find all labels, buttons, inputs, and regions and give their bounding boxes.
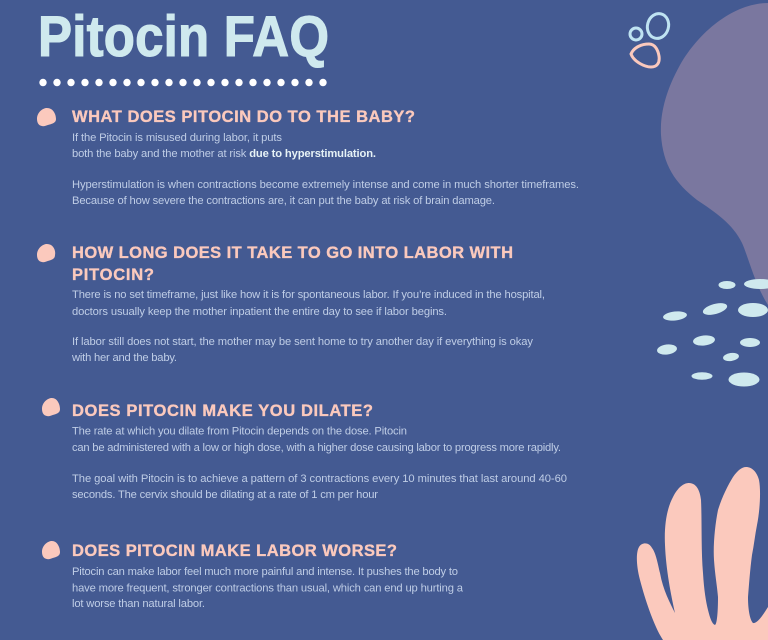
body text 2: with her and the baby. (71, 352, 177, 364)
panel: what does Pitocin do to the baby (37, 108, 579, 207)
heading 4: DOES PITOCIN MAKE LABOR WORSE? (72, 542, 397, 560)
body text 2: doctors usually keep the mother inpatient the entire day to see if labor begins. (72, 306, 447, 318)
heading 3: DOES PITOCIN MAKE YOU DILATE? (72, 402, 373, 420)
body text 4: lot worse than natural labor. (72, 598, 205, 610)
panel: does Pitocin make labor worse (42, 541, 464, 610)
title: Pitocin FAQ (38, 5, 329, 69)
heading 2: HOW LONG DOES IT TAKE TO GO INTO LABOR WITH (72, 244, 513, 262)
body text 4 (72, 566, 464, 610)
heading 2 (72, 244, 513, 284)
body text 2: If labor still does not start, the mother may be sent home to try another day if everything is okay (72, 336, 533, 348)
body text 3 (72, 426, 567, 501)
dotted divider (39, 79, 327, 86)
panel: does Pitocin make you dilate (42, 398, 567, 501)
icon: pink bullet 2 (37, 244, 55, 262)
heading 2: PITOCIN? (72, 266, 154, 284)
body text 1: Hyperstimulation is when contractions become extremely intense and come in much shorter timeframes. (72, 179, 579, 191)
icon: pink bullet 3 (42, 398, 60, 416)
body text 3: The rate at which you dilate from Pitocin depends on the dose. Pitocin (72, 426, 407, 438)
body text 2: There is no set timeframe, just like how it is for spontaneous labor. If you’re induced in the hospital, (72, 289, 545, 301)
body text 1: both the baby and the mother at risk due to hyperstimulation. (72, 148, 376, 160)
body text 1: Because of how severe the contractions are, it can put the baby at risk of brain damage. (72, 195, 495, 207)
decorative spots: light blue pebbles (656, 279, 768, 386)
decorative coral: pink fingers (637, 467, 768, 640)
body text 3: can be administered with a low or high dose, with a higher dose causing labor to progress more rapidly. (72, 442, 561, 454)
icon: pink bullet 1 (37, 108, 56, 126)
body text 4: have more frequent, stronger contractions than usual, which can end up hurting a (72, 582, 464, 594)
body text 1: If the Pitocin is misused during labor, it puts (72, 132, 282, 144)
decorative blob: mauve (661, 3, 768, 305)
panel: how long does it take (37, 244, 545, 364)
body text 4: Pitocin can make labor feel much more painful and intense. It pushes the body to (72, 566, 458, 578)
body text 2 (71, 289, 545, 364)
icon: pink bullet 4 (42, 541, 60, 559)
icon: outlined pebbles (630, 11, 671, 67)
body text 1 (72, 132, 579, 207)
heading 1: WHAT DOES PITOCIN DO TO THE BABY? (72, 108, 415, 126)
body text 3: seconds. The cervix should be dilating at a rate of 1 cm per hour (72, 489, 378, 501)
body text 3: The goal with Pitocin is to achieve a pattern of 3 contractions every 10 minutes that last around 40-60 (72, 473, 567, 485)
